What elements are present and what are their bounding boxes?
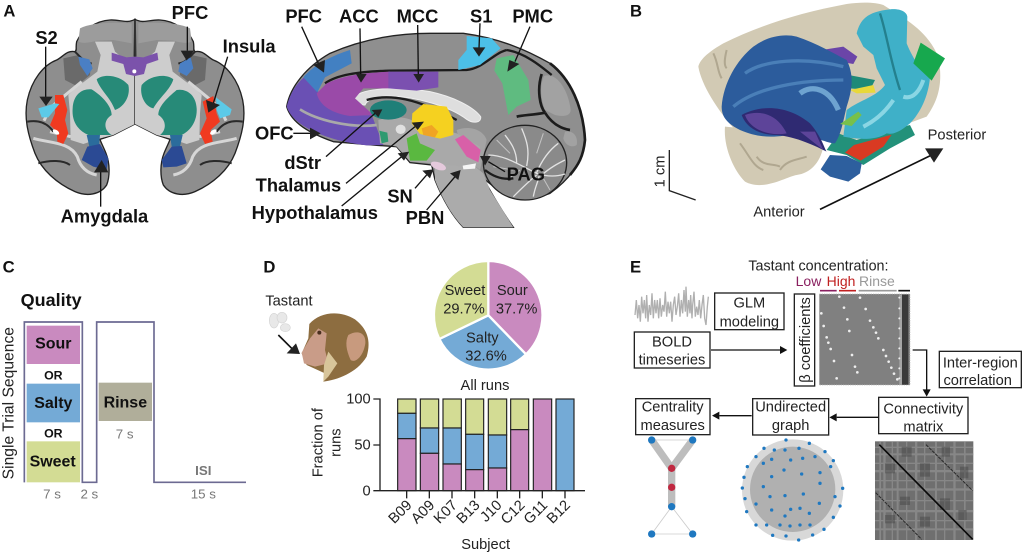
duration labels <box>43 426 216 501</box>
tastant droplets <box>269 312 290 332</box>
region: SN pale pink <box>430 160 447 172</box>
label and arrow: dStr: dStr <box>284 152 321 173</box>
beta coefficient matrix <box>819 294 910 385</box>
occipital sulci <box>517 63 585 175</box>
light green patch <box>840 112 862 126</box>
region: hypothalamus green <box>407 133 435 161</box>
duration labels: 7 s <box>43 486 61 501</box>
label and arrow: OFC <box>255 122 321 143</box>
pie labels: 32.6% <box>465 349 507 365</box>
x tick labels: J10 <box>477 498 505 526</box>
arrow: BOLD to coefficients <box>711 346 787 354</box>
x tick labels: K07 <box>431 498 461 527</box>
label and arrow: S1 <box>470 5 492 57</box>
corpus callosum <box>355 89 481 122</box>
pie labels: 29.7% <box>443 301 485 317</box>
box: Centrality measures: measures <box>640 418 705 434</box>
label and arrow: PFC <box>285 5 325 73</box>
beige brain surface <box>698 3 940 185</box>
slice: Salty <box>439 315 526 370</box>
region: nucleus accumbens green <box>379 131 388 143</box>
y axis label: Fraction of <box>310 407 326 477</box>
x tick labels: B12 <box>544 498 574 527</box>
orientation arrow: Anterior <box>753 205 805 221</box>
box: GLM modeling: GLM <box>733 295 765 311</box>
panel D: tastant runs <box>263 258 585 553</box>
condition legend <box>796 273 910 291</box>
box: GLM modeling <box>715 293 784 331</box>
region: PBN white <box>463 163 476 169</box>
y axis label <box>310 407 345 477</box>
purple top region <box>822 47 857 64</box>
region: ACC magenta <box>317 72 390 116</box>
timing waveform <box>24 322 246 482</box>
slice: Sour <box>488 261 543 354</box>
box: beta coefficients: β coefficients <box>798 297 814 383</box>
label and arrow: Thalamus <box>256 122 424 196</box>
duration labels: 7 s <box>116 426 134 441</box>
sulcus streak <box>300 109 377 126</box>
label and arrow: PMC: PMC <box>512 5 553 26</box>
label and arrow: PBN: PBN <box>406 207 444 228</box>
sulcus shading <box>713 50 807 170</box>
yellow region <box>850 85 876 93</box>
label and arrow: Thalamus: Thalamus <box>256 175 341 196</box>
bars: sour <box>398 399 552 491</box>
scale bar: 1 cm <box>652 156 668 187</box>
stimulus box: Sweet: Sweet <box>30 454 76 471</box>
connectivity matrix heatmap <box>875 441 973 540</box>
label and arrow: dStr <box>284 109 382 173</box>
pie labels: 37.7% <box>496 301 537 317</box>
label and arrow: Hypothalamus: Hypothalamus <box>252 202 378 223</box>
box: BOLD timeseries: BOLD <box>652 335 692 351</box>
region: insula red <box>50 95 220 144</box>
y axis label: Single Trial Sequence <box>0 327 17 479</box>
teal green lower structure <box>827 125 915 165</box>
stimulus box: Rinse <box>99 383 152 421</box>
label and arrow: S1: S1 <box>470 5 492 26</box>
x axis label: Subject <box>461 537 510 553</box>
label and arrow: PMC <box>507 5 553 72</box>
ventricle holes <box>52 69 217 136</box>
text: OR: OR <box>44 427 63 441</box>
box: BOLD timeseries <box>634 332 710 368</box>
region: PFC blue <box>78 57 193 76</box>
box: Centrality measures: Centrality <box>642 400 704 416</box>
region: striatum teal <box>73 76 197 135</box>
panel letter D: D <box>263 258 275 277</box>
label and arrow: Insula <box>206 36 276 113</box>
label and arrow: Amygdala: Amygdala <box>61 206 149 227</box>
panel letter B: B <box>630 2 642 21</box>
label and arrow: Amygdala <box>61 160 149 227</box>
y tick labels: 50 <box>354 437 371 453</box>
box: Inter-region correlation <box>939 351 1021 389</box>
cingulate sulcus <box>325 50 552 120</box>
stimulus box: Sweet <box>27 441 80 482</box>
centrality network diagram <box>648 436 696 538</box>
slice: Sweet <box>434 261 488 339</box>
blue lower region <box>821 155 862 182</box>
orientation arrow <box>753 127 986 221</box>
duration labels: ISI <box>195 463 211 478</box>
BOLD time series trace <box>635 287 708 325</box>
arrow: connectivity to graph <box>829 413 878 421</box>
region: PFC blue <box>303 50 352 92</box>
panel A: sagittal brain section <box>252 5 585 228</box>
region: amygdala blue <box>82 135 187 170</box>
heading: Quality: Quality <box>21 290 82 310</box>
x tick labels: A09 <box>408 498 438 527</box>
y tick labels <box>346 391 371 499</box>
panel B: 3D brain rendering <box>630 2 986 221</box>
label and arrow: PFC: PFC <box>172 2 208 23</box>
light teal cortical region <box>843 9 930 139</box>
icon: monkey head <box>302 313 369 382</box>
axes and ticks <box>373 399 585 498</box>
chart title: All runs: All runs <box>461 378 509 394</box>
label and arrow: S2 <box>35 27 58 106</box>
pie chart: all runs <box>434 261 543 370</box>
x tick labels: G11 <box>521 498 551 528</box>
brainstem <box>435 157 513 227</box>
y tick labels: 0 <box>363 483 371 499</box>
cerebellum <box>483 125 567 200</box>
region: thalamus yellow <box>412 104 453 139</box>
box: Undirected graph: graph <box>772 418 809 434</box>
y tick labels: 100 <box>346 391 371 407</box>
region: S2 light blue <box>38 97 232 118</box>
region: dorsal striatum teal <box>370 100 407 120</box>
panel letter A: A <box>3 2 15 21</box>
dark purple medial region <box>742 108 827 152</box>
arrow: tastant into mouth <box>278 335 300 354</box>
text: OR: OR <box>44 368 63 382</box>
lower tectum gray <box>457 128 487 170</box>
red region <box>845 135 892 161</box>
anterior commissure spot <box>396 125 406 134</box>
label and arrow: S2: S2 <box>35 27 58 48</box>
stacked bar chart <box>310 391 585 553</box>
region: medial frontal purple <box>287 77 383 145</box>
label and arrow: PAG: PAG <box>507 164 545 185</box>
region: anterior cingulate purple <box>112 53 158 76</box>
region: PMC green <box>494 55 531 115</box>
box: Undirected graph <box>753 399 829 435</box>
arrow: graph to centrality <box>712 412 752 420</box>
box: Connectivity matrix: Connectivity <box>883 401 964 417</box>
panel letter C: C <box>3 258 15 277</box>
bars: salty <box>398 399 574 491</box>
box: Inter-region correlation: correlation <box>943 373 1012 389</box>
panel C: trial sequence <box>0 258 246 501</box>
label and arrow: MCC <box>397 5 438 83</box>
label and arrow: ACC: ACC <box>339 5 379 26</box>
undirected graph network <box>741 438 844 542</box>
condition legend: Rinse <box>859 273 895 289</box>
panel A: coronal brain section <box>3 2 276 227</box>
coronal brain base <box>26 19 244 194</box>
blue fold highlights <box>733 61 843 107</box>
box: Connectivity matrix <box>879 397 968 436</box>
box: Inter-region correlation: Inter-region <box>943 355 1018 371</box>
label and arrow: SN: SN <box>387 185 413 206</box>
subcortical gray <box>378 117 480 167</box>
stimulus box: Rinse: Rinse <box>104 394 147 411</box>
box: Undirected graph: Undirected <box>755 400 826 416</box>
region: thalamus orange <box>422 125 438 137</box>
title: Tastant concentration: Tastant concentration: <box>748 259 889 275</box>
label: Tastant: Tastant <box>265 294 313 310</box>
x tick labels: B09 <box>386 498 415 527</box>
region: PAG pink <box>455 135 481 162</box>
label and arrow: Hypothalamus <box>252 152 409 223</box>
duration labels: 15 s <box>191 486 216 501</box>
stimulus box: Sour <box>27 326 80 364</box>
large blue cortical region <box>722 35 852 143</box>
label and arrow: ACC <box>339 5 379 83</box>
bars: sweet <box>398 399 529 435</box>
pie labels: Salty <box>466 330 499 346</box>
box: Centrality measures <box>636 399 710 435</box>
arrow: matrix to connectivity <box>913 350 931 397</box>
label and arrow: PFC <box>172 2 208 61</box>
stimulus box: Sour: Sour <box>35 336 72 353</box>
stimulus box: Salty: Salty <box>34 395 73 412</box>
box: Connectivity matrix: matrix <box>903 420 944 436</box>
scale bar <box>652 150 696 200</box>
panel E: analysis pipeline <box>630 258 1021 542</box>
label and arrow: Insula: Insula <box>223 36 276 57</box>
x tick labels: B13 <box>454 498 483 527</box>
stimulus box: Salty <box>27 384 80 422</box>
bright green region <box>913 43 945 81</box>
occipital gyri <box>541 75 577 146</box>
label and arrow: PFC: PFC <box>285 5 322 26</box>
pie labels: Sour <box>497 283 528 299</box>
condition legend: Low <box>796 273 822 289</box>
region: S1 light blue <box>458 36 501 70</box>
label and arrow: SN <box>387 169 433 206</box>
orientation arrow: Posterior <box>928 127 986 143</box>
label and arrow: MCC: MCC <box>397 5 438 26</box>
condition legend: High <box>827 273 855 289</box>
panel letter E: E <box>630 258 641 277</box>
pie labels: Sweet <box>445 283 485 299</box>
box: GLM modeling: modeling <box>720 315 779 331</box>
x tick labels <box>386 498 574 528</box>
box: BOLD timeseries: timeseries <box>639 352 705 368</box>
x tick labels: C12 <box>498 498 528 528</box>
sagittal brain base <box>287 33 585 227</box>
label and arrow: OFC: OFC <box>255 122 294 143</box>
light teal highlights <box>863 80 923 127</box>
pie labels <box>443 283 537 365</box>
region: MCC purple <box>388 72 438 91</box>
label and arrow: PBN <box>406 170 461 228</box>
duration labels: 2 s <box>80 486 99 501</box>
label and arrow: PAG <box>480 156 545 185</box>
dark green strip <box>843 74 875 90</box>
y axis label: runs <box>329 428 345 457</box>
